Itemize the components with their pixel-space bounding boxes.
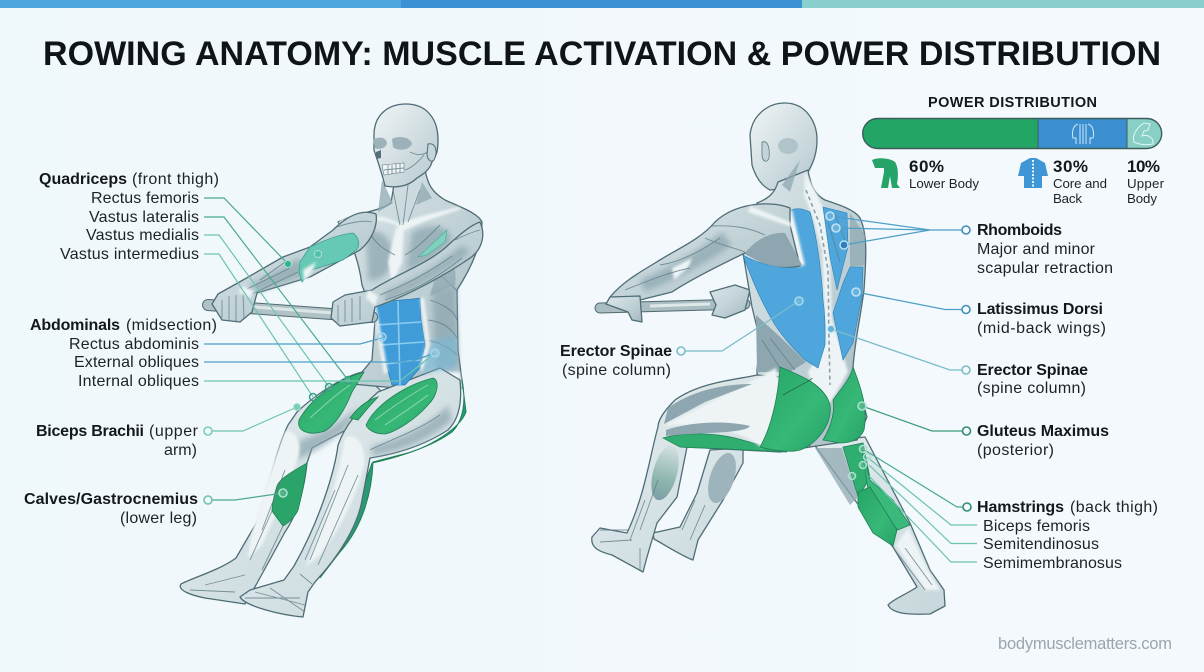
stat: upper body: Upper	[1127, 176, 1165, 191]
label: quadriceps: (front thigh)	[132, 171, 219, 188]
leader lines: abdominals	[204, 333, 439, 381]
far hand and bar	[600, 285, 750, 318]
label: biceps brachii	[36, 423, 199, 459]
label: quadriceps: Vastus lateralis	[89, 209, 199, 226]
label: left erector spinae	[560, 343, 672, 379]
label: calves: (lower leg)	[120, 510, 197, 527]
label: rhomboids: Major and minor	[977, 241, 1096, 258]
label: abdominals: Internal obliques	[78, 373, 199, 390]
stat: core and back	[1018, 157, 1107, 206]
label: rhomboids: scapular retraction	[977, 260, 1113, 277]
label: erector spinae: (spine column)	[977, 380, 1086, 397]
power heading: POWER DISTRIBUTION	[928, 95, 1097, 111]
label: abdominals: Abdominals	[30, 317, 120, 334]
title: ROWING ANATOMY: MUSCLE ACTIVATION & POWER DISTRIBUTION	[43, 35, 1161, 73]
head	[750, 103, 817, 190]
label: calves: Calves/Gastrocnemius	[24, 491, 198, 508]
label: abdominals	[30, 317, 217, 390]
stat: upper body	[1127, 157, 1165, 206]
top colour band	[0, 0, 1204, 8]
label: latissimus dorsi: Latissimus Dorsi	[977, 301, 1103, 318]
abdominals	[372, 298, 456, 385]
icon: arm in bar	[1133, 123, 1153, 145]
stat: upper body: 10%	[1127, 157, 1160, 176]
stat: core and back: Back	[1053, 191, 1082, 206]
website credit: bodymusclematters.com	[998, 635, 1172, 653]
leader lines: rhomboids	[826, 212, 970, 249]
stat: upper body: Body	[1127, 191, 1157, 206]
skull	[373, 104, 438, 187]
leader line: gluteus maximus	[858, 402, 970, 435]
label: gluteus maximus	[977, 423, 1109, 459]
icon: lower body	[872, 158, 900, 188]
label: rhomboids	[977, 222, 1113, 277]
back muscles	[743, 207, 863, 368]
panel: power distribution	[863, 95, 1165, 206]
label: hamstrings: (back thigh)	[1070, 499, 1158, 516]
label: erector spinae	[977, 362, 1088, 397]
label: left erector spinae: (spine column)	[562, 362, 671, 379]
stat: lower body: Lower Body	[909, 176, 979, 191]
label: erector spinae: Erector Spinae	[977, 362, 1088, 379]
label: biceps brachii: (upper	[149, 423, 199, 440]
label: hamstrings	[977, 499, 1158, 572]
label: latissimus dorsi	[977, 301, 1106, 337]
label: quadriceps: Rectus femoris	[91, 190, 199, 207]
label: hamstrings: Biceps femoris	[983, 518, 1090, 535]
stacked power bar	[863, 118, 1162, 148]
torso	[743, 160, 867, 447]
label: hamstrings: Semitendinosus	[983, 536, 1099, 553]
label: abdominals: External obliques	[74, 354, 199, 371]
leader line: left erector spinae	[677, 297, 803, 355]
stat: core and back: Core and	[1053, 176, 1107, 191]
label: left erector spinae: Erector Spinae	[560, 343, 672, 360]
figure: back view rower	[592, 103, 945, 614]
glutes and rear thigh	[592, 367, 865, 572]
leader line: calves	[204, 489, 287, 504]
label: quadriceps: Vastus intermedius	[60, 246, 199, 263]
far leg	[653, 448, 743, 560]
label: quadriceps	[39, 171, 219, 263]
icon: back	[1018, 158, 1048, 188]
label: latissimus dorsi: (mid-back wings)	[977, 320, 1106, 337]
label: quadriceps: Quadriceps	[39, 171, 127, 188]
leader line: latissimus dorsi	[852, 288, 970, 314]
front leg	[813, 437, 945, 614]
label: quadriceps: Vastus medialis	[86, 227, 199, 244]
label: biceps brachii: arm)	[164, 442, 197, 459]
label: gluteus maximus: (posterior)	[977, 442, 1054, 459]
leader lines: hamstrings	[848, 446, 977, 562]
leader line: erector spinae	[828, 326, 970, 374]
bar	[208, 305, 372, 317]
figure: front view rower	[180, 104, 483, 617]
stat: lower body	[872, 157, 979, 191]
stat: core and back: 30%	[1053, 157, 1088, 176]
label: calves	[24, 491, 198, 527]
label: abdominals: Rectus abdominis	[69, 336, 199, 353]
right arm	[331, 222, 483, 326]
label: abdominals: (midsection)	[126, 317, 217, 334]
label: biceps brachii: Biceps Brachii	[36, 423, 144, 440]
left leg	[180, 372, 388, 604]
label: hamstrings: Semimembranosus	[983, 555, 1122, 572]
stat: lower body: 60%	[909, 157, 944, 176]
quadriceps muscles	[299, 372, 437, 434]
leader lines: quadriceps	[204, 198, 352, 400]
near arm	[606, 204, 802, 322]
right leg	[240, 368, 466, 617]
torso	[338, 170, 482, 420]
label: hamstrings: Hamstrings	[977, 499, 1064, 516]
left arm with biceps	[212, 212, 376, 322]
icon: back in bar	[1073, 124, 1093, 144]
label: rhomboids: Rhomboids	[977, 222, 1062, 239]
label: gluteus maximus: Gluteus Maximus	[977, 423, 1109, 440]
leader line: biceps	[204, 404, 300, 435]
